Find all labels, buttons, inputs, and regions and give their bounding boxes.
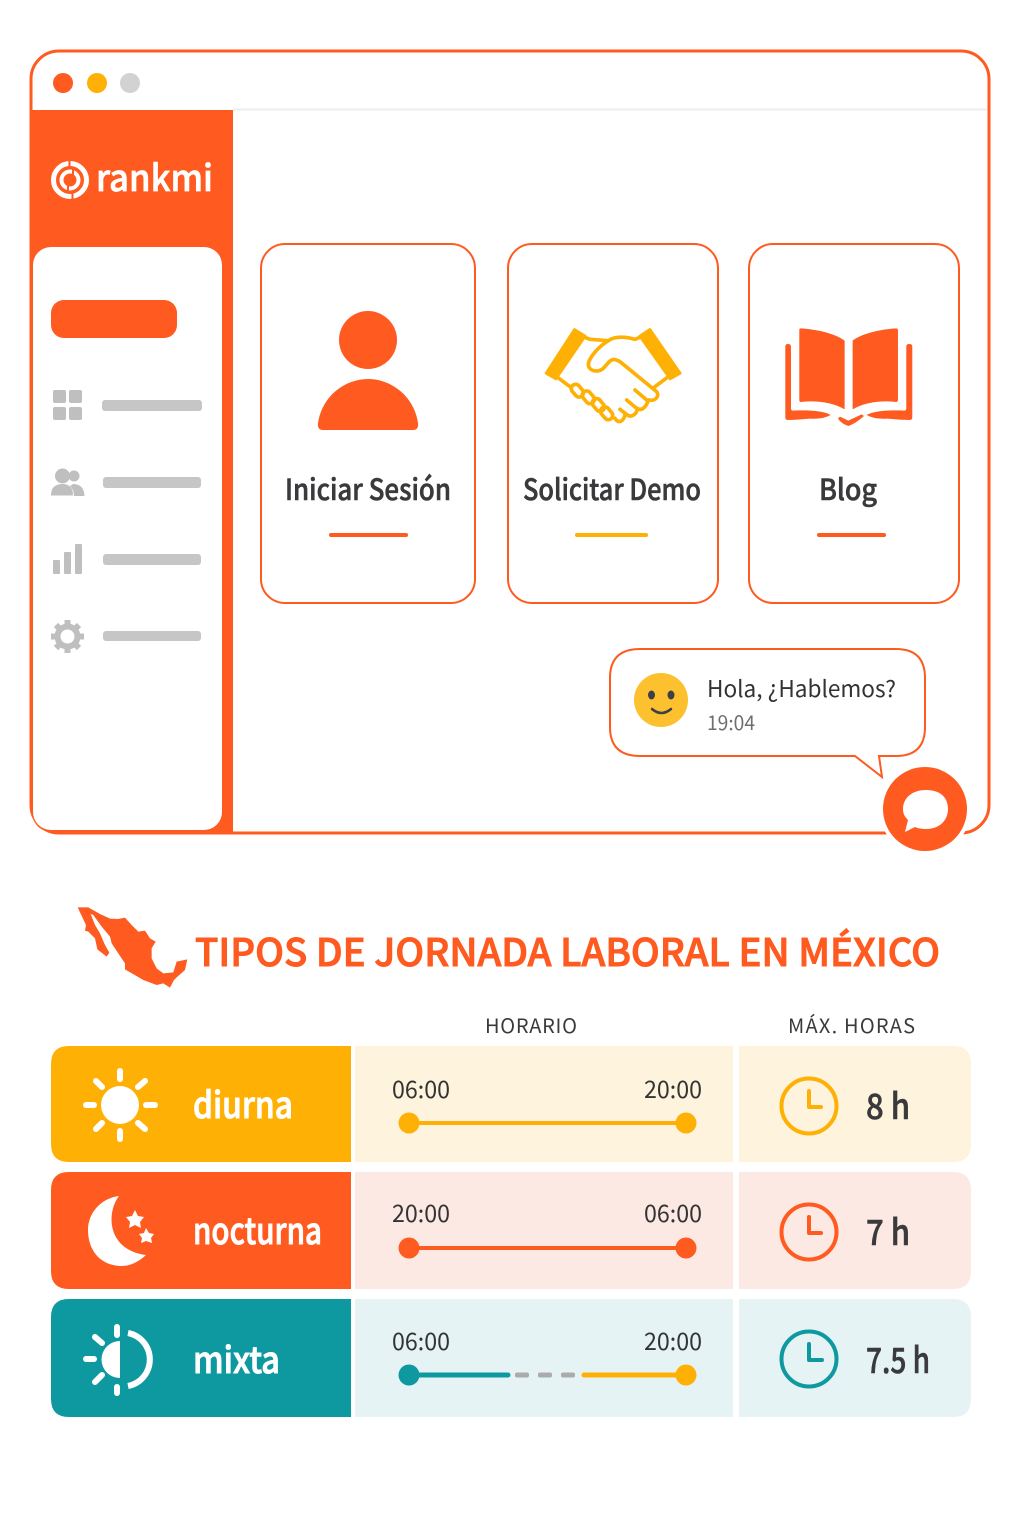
menu item: users — [51, 468, 201, 496]
icon: moon and stars — [88, 1196, 154, 1266]
max hours: 7 h — [782, 1204, 910, 1260]
row: nocturna: nocturna — [193, 1203, 322, 1255]
max hours: 7.5 h — [782, 1332, 930, 1386]
timeline: 20:00 — [392, 1194, 450, 1229]
card: Solicitar Demo — [508, 244, 718, 603]
timeline — [392, 1322, 702, 1386]
timeline: 20:00 — [644, 1322, 702, 1357]
row: mixta: mixta — [193, 1332, 280, 1384]
column header: max hours: MÁX. HORAS — [788, 1010, 915, 1039]
max hours: 7 h: 7 h — [866, 1205, 910, 1256]
menu button — [51, 300, 177, 338]
card: Iniciar Sesión — [261, 244, 475, 603]
menu item: settings — [51, 620, 201, 653]
chat bubble — [610, 649, 925, 777]
icon: person — [318, 311, 418, 430]
icon: half sun — [86, 1327, 150, 1393]
max hours: 8 h — [782, 1078, 910, 1134]
timeline — [392, 1194, 702, 1258]
browser window frame — [31, 51, 989, 833]
timeline — [392, 1070, 702, 1134]
row: diurna — [51, 1046, 971, 1162]
icon: open book — [785, 328, 912, 426]
max hours: 8 h: 8 h — [866, 1079, 910, 1130]
menu item: chart — [53, 544, 201, 574]
timeline: 06:00 — [392, 1070, 450, 1105]
max hours: 7.5 h: 7.5 h — [866, 1333, 930, 1384]
icon: smiley — [634, 673, 688, 727]
card: Iniciar Sesión: Iniciar Sesión — [285, 467, 451, 509]
card: Solicitar Demo: Solicitar Demo — [523, 467, 701, 509]
chat button — [879, 763, 971, 855]
timeline: 20:00 — [644, 1070, 702, 1105]
icon: handshake — [546, 329, 681, 422]
row: mixta — [51, 1299, 971, 1417]
column header: horario: HORARIO — [485, 1010, 577, 1039]
title: TIPOS DE JORNADA LABORAL EN MÉXICO — [195, 922, 940, 977]
timeline: 06:00 — [392, 1322, 450, 1357]
card: Blog — [749, 244, 959, 603]
timeline: 06:00 — [644, 1194, 702, 1229]
chat bubble: 19:04 — [707, 707, 755, 736]
icon: sun — [86, 1071, 155, 1139]
row: diurna: diurna — [193, 1077, 293, 1129]
menu item: dashboard — [53, 390, 202, 420]
chat bubble: Hola, ¿Hablemos? — [707, 670, 896, 704]
sidebar — [31, 110, 233, 833]
sidebar menu panel — [33, 247, 222, 830]
icon: map of Mexico — [78, 907, 187, 988]
card: Blog: Blog — [819, 467, 877, 509]
logo: rankmi: rankmi — [96, 150, 213, 202]
row: nocturna — [51, 1172, 971, 1289]
